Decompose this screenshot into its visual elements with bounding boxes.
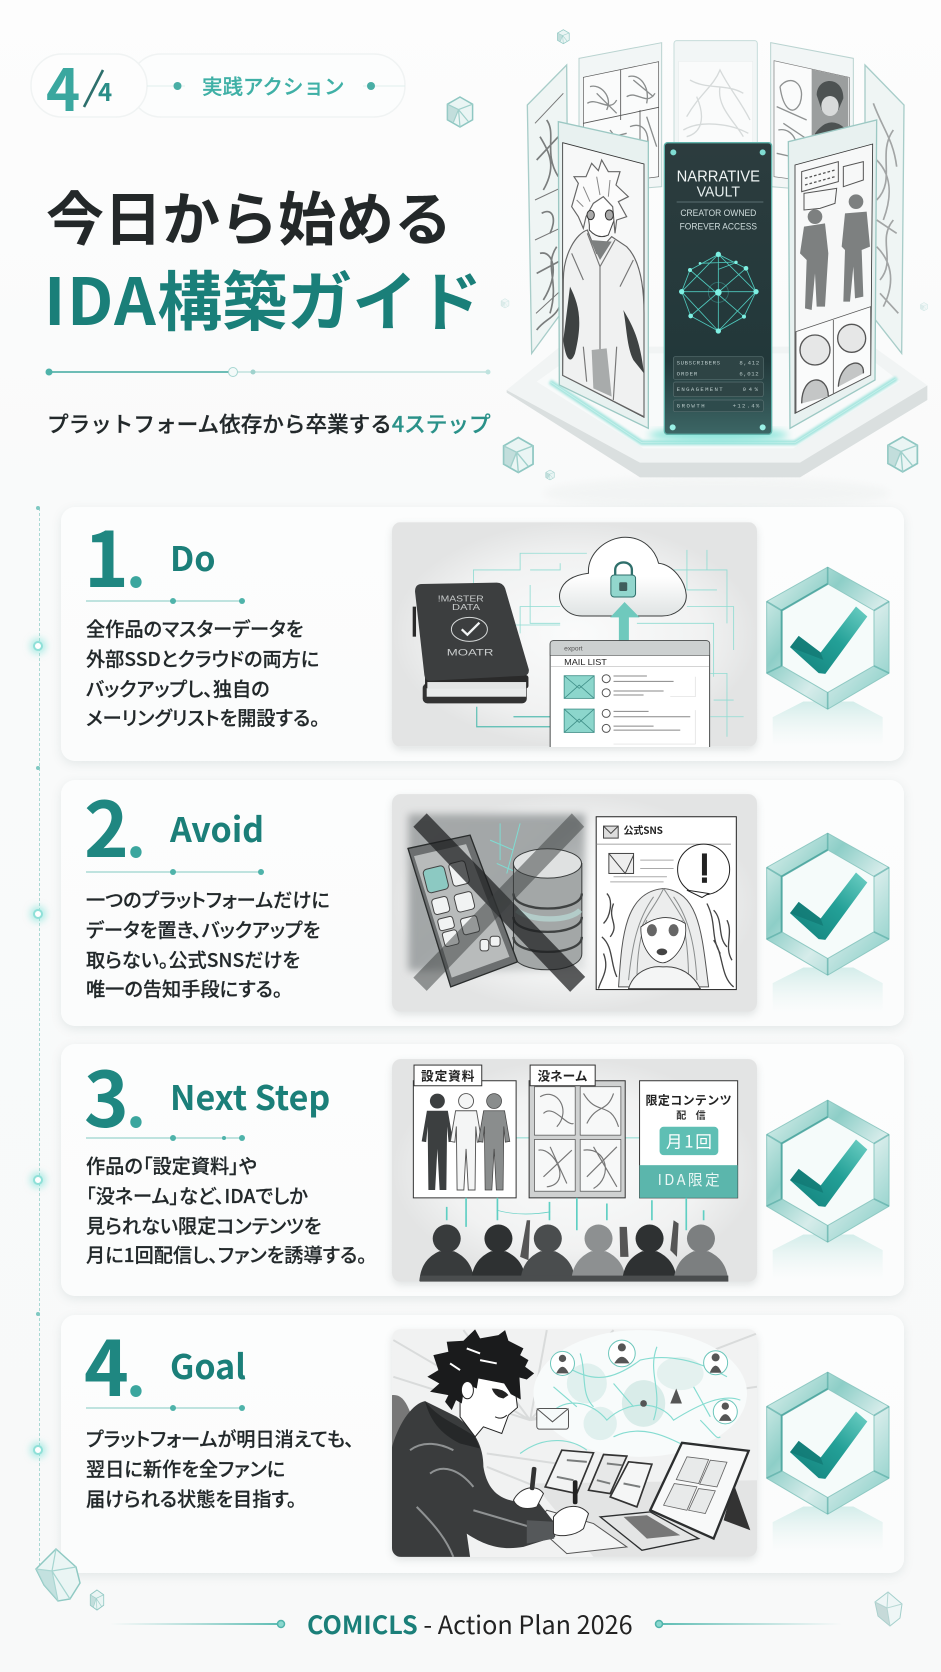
timeline small dot — [36, 1312, 40, 1316]
cross out bars — [413, 813, 585, 992]
SSD stack: !MASTER — [438, 595, 484, 604]
mail list window — [550, 641, 710, 754]
exclusive content card: 配信 — [676, 1107, 706, 1122]
step number: 3. — [84, 1039, 146, 1149]
step text: 唯一の告知手段にする。 — [86, 974, 282, 1002]
dark backdrop — [408, 814, 585, 971]
upload arrow — [610, 602, 640, 642]
timeline start dot — [36, 506, 40, 510]
timeline rail — [39, 508, 40, 1565]
footer text: COMICLS - Action Plan 2026 — [307, 1606, 633, 1642]
crystal top — [557, 30, 569, 44]
illustration: backup to cloud and mail list — [392, 522, 757, 747]
storyboard sheet: 没ネーム — [537, 1066, 588, 1085]
crystal right — [888, 437, 917, 472]
girl — [619, 888, 709, 987]
step text: 一つのプラットフォームだけに — [86, 885, 330, 913]
step 3 card — [61, 1044, 904, 1296]
timeline node 2 — [33, 909, 43, 919]
crystal near pill — [446, 96, 474, 128]
step text: メーリングリストを開設する。 — [86, 703, 320, 731]
creator hands and pens — [513, 1467, 589, 1536]
badge: check mark — [766, 832, 890, 998]
timeline node 3 — [33, 1175, 43, 1185]
vault stats: GROWTH — [677, 402, 705, 409]
network emblem — [682, 254, 756, 331]
footer line right — [654, 1620, 830, 1628]
database cylinder — [513, 849, 582, 970]
back left panel — [579, 43, 662, 193]
vault stats: ORDER — [677, 371, 698, 378]
step 4 card — [61, 1315, 904, 1573]
connecting light strands — [447, 1198, 704, 1230]
fan crowd — [419, 1220, 728, 1282]
header divider — [46, 367, 490, 377]
step label: Goal — [170, 1340, 246, 1389]
page counter pill — [30, 44, 406, 128]
front right panel: character sheet — [788, 120, 877, 428]
step rule — [86, 871, 262, 873]
exclusive content card: 限定コンテンツ — [646, 1091, 732, 1108]
illustration: limited content and fans — [392, 1059, 757, 1282]
mail list window: export — [564, 646, 583, 653]
step text: 全作品のマスターデータを — [86, 614, 303, 642]
step text: 月に1回配信し、ファンを誘導する。 — [86, 1240, 367, 1268]
SSD stack: MOATR — [447, 647, 494, 657]
timeline node 4 — [33, 1445, 43, 1455]
timeline small dot — [36, 766, 40, 770]
storyboard sheet — [529, 1065, 625, 1198]
back right panel — [771, 43, 853, 193]
step rule — [86, 1407, 243, 1409]
exclusive content card: 月1回 — [666, 1128, 712, 1152]
official SNS post — [596, 817, 736, 990]
title line 1: 今日から始める — [46, 173, 452, 257]
step 1 card — [61, 507, 904, 761]
page number small: 4 — [98, 73, 112, 108]
busy background strokes — [599, 893, 734, 989]
phone — [408, 835, 517, 987]
step text: データを置き、バックアップを — [86, 915, 320, 943]
step text: 取らない。公式SNSだけを — [86, 945, 300, 973]
desk devices — [533, 1443, 750, 1554]
step 2 card — [61, 780, 904, 1026]
step rule — [86, 600, 243, 602]
vault stats: 6,012 — [739, 371, 759, 378]
vault heading second line: VAULT — [697, 185, 740, 201]
exclusive content card: IDA限定 — [658, 1169, 720, 1190]
fan network — [520, 1340, 740, 1454]
hero illustration: narrative vault — [500, 29, 928, 480]
step text: 作品の「設定資料」や — [86, 1151, 257, 1179]
badge: check mark — [766, 1372, 890, 1536]
title line 2: IDA構築ガイド — [44, 250, 482, 344]
character sheet: 設定資料 — [421, 1066, 475, 1085]
footer line left — [121, 1620, 286, 1628]
character sheet — [413, 1065, 516, 1198]
step text — [86, 1424, 354, 1512]
far left panel — [527, 65, 568, 353]
creator face and hair — [427, 1329, 534, 1437]
SSD stack: DATA — [452, 603, 481, 612]
crystal left — [504, 438, 533, 472]
step text: 届けられる状態を目指す。 — [86, 1484, 296, 1512]
page number large: 4 — [46, 44, 80, 128]
vault stats: ENGAGEMENT — [677, 386, 723, 393]
step label: Avoid — [170, 803, 264, 852]
far right panel — [865, 65, 904, 353]
badge: check mark — [766, 566, 890, 732]
SSD stack — [413, 583, 529, 703]
vault heading: NARRATIVE — [677, 168, 760, 185]
floating drop right — [920, 302, 928, 311]
cloud with lock — [560, 537, 686, 616]
vault stats: 94% — [743, 386, 759, 393]
step rule — [86, 1137, 243, 1139]
step text: バックアップし、独自の — [86, 674, 270, 702]
circuit lines — [473, 550, 744, 737]
step text: 翌日に新作を全ファンに — [86, 1454, 285, 1482]
crystal bottom right — [874, 1592, 902, 1626]
step text — [86, 614, 320, 731]
step text: 「没ネーム」など、IDAでしか — [86, 1181, 308, 1209]
platform — [507, 347, 927, 510]
badge: check mark — [766, 1100, 890, 1264]
vault stats — [673, 357, 763, 412]
step number: 4. — [84, 1308, 146, 1418]
step text: 見られない限定コンテンツを — [86, 1211, 321, 1239]
illustration: creator reaching all fans — [392, 1329, 757, 1557]
official SNS post: 公式SNS — [624, 822, 663, 837]
vault stats: SUBSCRIBERS — [677, 360, 721, 367]
step text — [86, 885, 330, 1002]
crystal bottom left — [35, 1548, 104, 1610]
front left panel: character — [558, 122, 648, 428]
vault tagline second line: FOREVER ACCESS — [680, 221, 757, 231]
step number: 1. — [84, 499, 146, 609]
step text: プラットフォームが明日消えても、 — [86, 1424, 354, 1452]
illustration: single platform risk — [392, 794, 757, 1012]
step number: 2. — [84, 769, 146, 879]
pill label: 実践アクション — [202, 70, 344, 100]
timeline node 1 — [33, 641, 43, 651]
creator hoodie — [392, 1395, 557, 1557]
step label: Do — [170, 532, 216, 581]
step text: 外部SSDとクラウドの両方に — [86, 644, 319, 672]
vault stats: 8,412 — [739, 360, 759, 367]
vault stats: +12.4% — [733, 402, 760, 409]
back centre panel — [674, 41, 757, 174]
centre vault panel — [648, 143, 788, 442]
exclusive content card — [640, 1081, 738, 1198]
step text — [86, 1151, 367, 1268]
floating drop left — [501, 299, 509, 308]
mail list window: MAIL LIST — [564, 657, 607, 667]
vault tagline: CREATOR OWNED — [680, 208, 757, 218]
subtitle: プラットフォーム依存から卒業する4ステップ — [47, 408, 491, 439]
step label: Next Step — [170, 1071, 330, 1120]
crystal small — [546, 470, 554, 480]
background rays — [393, 1330, 757, 1494]
